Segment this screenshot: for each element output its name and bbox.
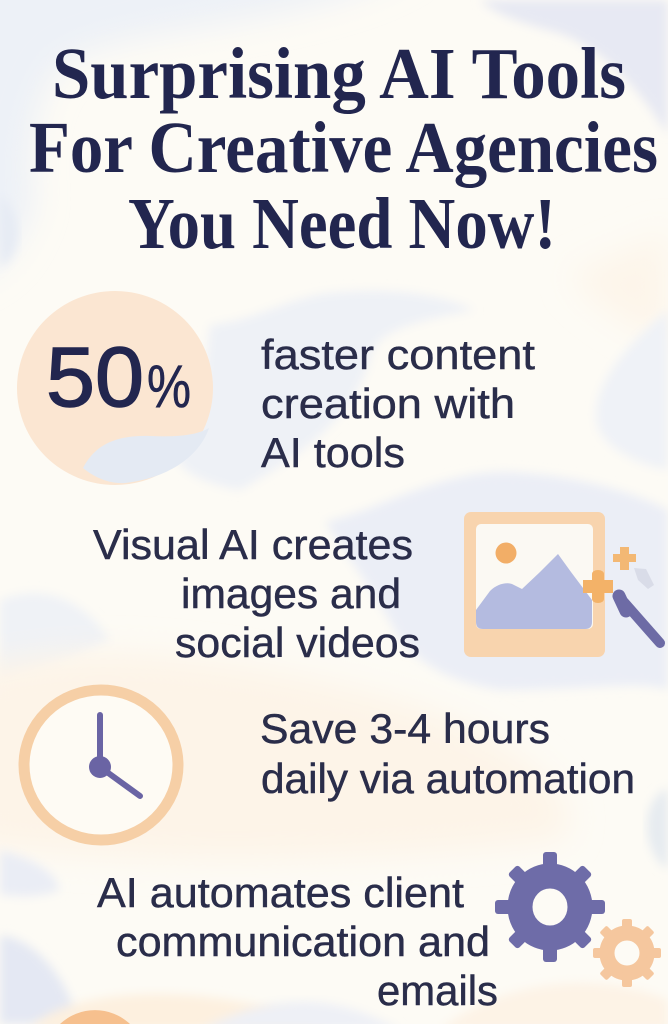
text: faster content creation: faster content [261,331,535,378]
text: client communication: emails [377,967,498,1014]
text: visual AI: social videos [175,619,420,666]
stat badge: 50%: 50 [46,330,144,424]
text: faster content creation: AI tools [261,429,405,476]
text: visual AI: Visual AI creates [93,521,413,568]
text: client communication: communication and [116,918,490,965]
text: visual AI: images and [181,570,401,617]
stat badge: 50%: % [147,353,191,420]
icon: large gear [495,852,605,962]
text: faster content creation [261,331,535,476]
partial orange circle [60,1010,130,1024]
text: save hours: Save 3-4 hours [260,705,550,752]
title: Surprising AI Tools [52,33,626,114]
text: client communication [97,869,498,1014]
text: faster content creation: creation with [261,380,515,427]
text: visual AI [93,521,420,666]
text: save hours [260,705,635,802]
icon: clock [24,690,178,840]
icon: small gear [593,919,661,987]
title: You Need Now! [128,183,556,264]
stat badge: 50% [17,291,213,485]
title [29,33,658,264]
text: save hours: daily via automation [261,755,635,802]
icon: image with magic wand [464,512,660,657]
text: client communication: AI automates client [97,869,464,916]
